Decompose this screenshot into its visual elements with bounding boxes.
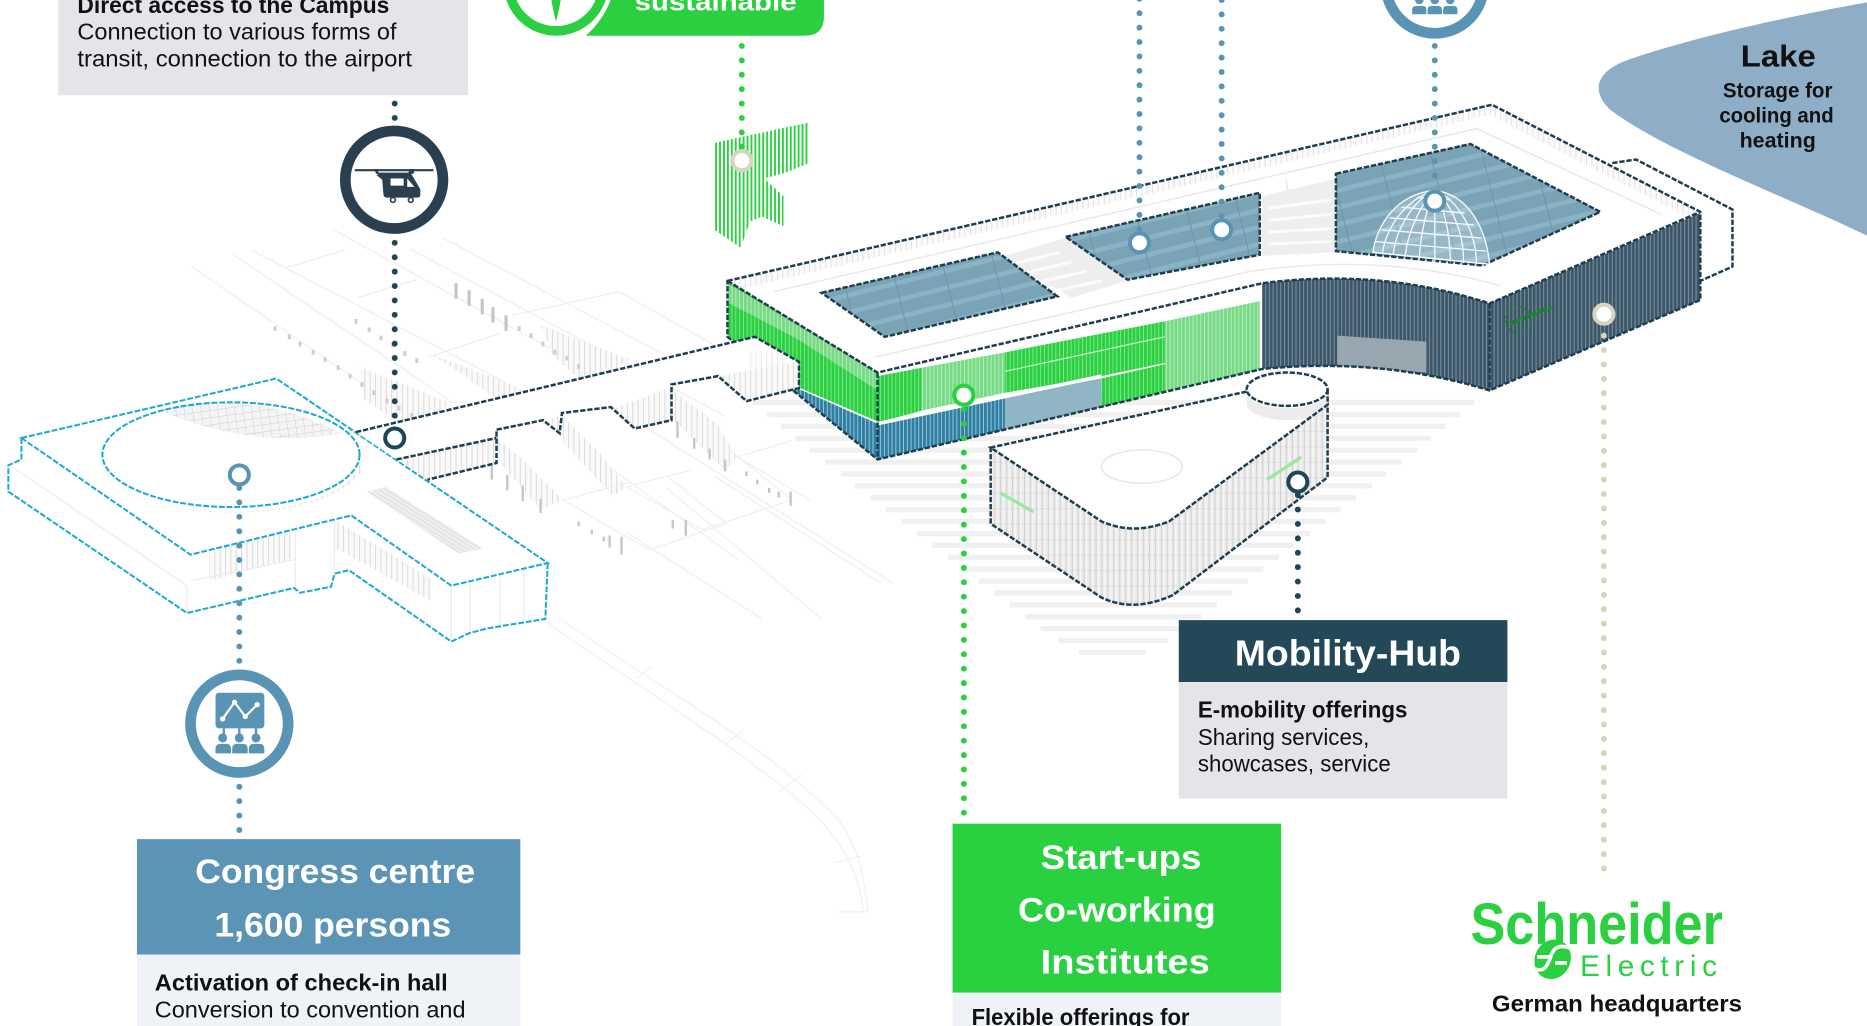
building: congress centre — [8, 379, 548, 642]
dotted connector: airport — [392, 104, 397, 425]
dotted connector: dome — [1432, 46, 1437, 186]
panel: congress centre: Activation of check-in hall — [155, 969, 448, 995]
panel: mobility hub: Sharing services, — [1198, 724, 1369, 750]
panel: start-ups: Co-working — [1018, 891, 1216, 929]
building: annex — [1612, 159, 1732, 281]
lake: cooling and — [1719, 105, 1834, 128]
text: German headquarters: German headquarters — [1492, 991, 1742, 1017]
left green facade — [728, 281, 878, 421]
panel: congress centre: Conversion to convention and — [155, 997, 466, 1023]
building: main campus — [728, 105, 1700, 459]
logo: Schneider Electric: Schneider — [1471, 892, 1723, 957]
icon: congress top — [1386, 0, 1484, 33]
panel: start-ups — [953, 824, 1281, 1026]
logo: Schneider Electric — [1471, 892, 1723, 985]
dotted connector: headquarters — [1601, 336, 1606, 870]
badge: sustainable — [508, 0, 824, 36]
lake: Storage for — [1723, 80, 1832, 103]
railway station sketch — [192, 230, 893, 619]
icon: presentation — [191, 675, 288, 772]
lake: Lake — [1741, 39, 1816, 74]
panel: direct access — [58, 0, 468, 95]
dotted connector: start-ups — [961, 409, 966, 814]
panel: mobility hub: E-mobility offerings — [1198, 697, 1407, 723]
panel: start-ups: Institutes — [1041, 944, 1210, 982]
icon: air taxi — [345, 131, 443, 229]
curved track sketch — [542, 619, 868, 912]
panel: congress centre — [137, 839, 520, 1026]
panel: mobility hub: showcases, service — [1198, 750, 1391, 776]
logo: Schneider Electric: Electric — [1580, 950, 1717, 983]
dotted connector: mobility hub — [1295, 495, 1300, 612]
roof light wells — [822, 252, 1057, 337]
lake — [1599, 2, 1867, 236]
panel: start-ups: Start-ups — [1041, 839, 1201, 877]
panel: congress centre: Congress centre — [195, 853, 475, 891]
panel: mobility hub — [1179, 620, 1507, 799]
roof surface — [728, 105, 1700, 373]
small green building element — [714, 123, 808, 248]
dashed main outline — [728, 105, 1700, 459]
dotted connector: roof gardens — [1139, 0, 1222, 231]
dashed footprint outline — [21, 379, 548, 586]
panel: congress centre: 1,600 persons — [214, 907, 451, 945]
glass dome — [1373, 190, 1490, 264]
building: mobility hub — [991, 373, 1328, 605]
lake: heating — [1740, 130, 1816, 153]
pin markers — [230, 151, 1613, 492]
dotted connector: sustainable — [739, 46, 744, 148]
dark right facade — [1262, 279, 1490, 390]
building: bridge connection — [356, 337, 799, 480]
striped ground shadow — [753, 400, 1474, 655]
panel: direct access: Connection to various forms of — [77, 18, 397, 44]
dotted connector: congress — [237, 488, 242, 831]
panel: direct access: transit, connection to the airport — [77, 46, 413, 72]
front facade — [878, 368, 922, 423]
facade logo mark — [1505, 307, 1551, 333]
panel: mobility hub: Mobility-Hub — [1235, 633, 1461, 673]
